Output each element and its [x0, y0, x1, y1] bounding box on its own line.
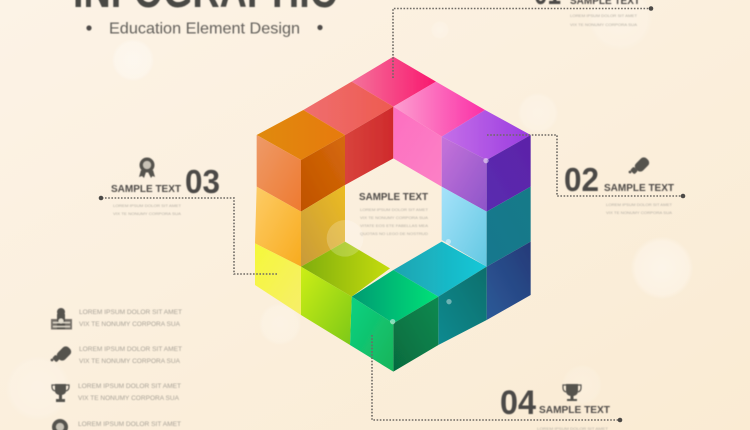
callout 03: 03	[185, 163, 220, 200]
list row: brush	[51, 345, 182, 365]
callout 02	[564, 156, 675, 215]
center text block: VITATE EOS ETE FABELLAS MEA	[360, 223, 428, 228]
list row: trophy: LOREM IPSUM DOLOR SIT AMET	[78, 384, 181, 390]
connector 01	[393, 8, 651, 78]
center text block: SAMPLE TEXT	[359, 191, 429, 203]
icon: brush 02	[629, 156, 651, 174]
upper side faces	[257, 107, 531, 212]
connector 02	[487, 135, 683, 196]
callout 01	[534, 0, 641, 27]
list row: trophy: VIX TE NONUMY CORPORA SUA	[78, 396, 179, 402]
list row: brush: LOREM IPSUM DOLOR SIT AMET	[79, 347, 182, 353]
list row: brush: VIX TE NONUMY CORPORA SUA	[79, 359, 180, 365]
list row: medal: LOREM IPSUM DOLOR SIT AMET	[78, 422, 181, 428]
callout 04	[500, 384, 611, 430]
glints on cube	[327, 158, 489, 324]
middle side faces	[255, 185, 531, 267]
callout 03: VIX TE NONUMY CORPORA SUA	[113, 211, 181, 216]
icon: building	[51, 308, 72, 330]
icon: trophy	[52, 384, 69, 402]
hexagonal cube ring	[255, 57, 531, 372]
connector 04	[372, 335, 620, 420]
list row: building: LOREM IPSUM DOLOR SIT AMET	[79, 310, 182, 316]
icon: medal	[52, 419, 68, 430]
callout 04: 04	[500, 384, 536, 422]
lower top faces	[301, 242, 487, 323]
subtitle: Education Element Design	[109, 20, 300, 38]
connector 03	[101, 198, 277, 274]
center text block	[359, 191, 429, 236]
icon: brush	[51, 345, 73, 362]
icon: medal 03	[139, 158, 155, 178]
top faces	[257, 57, 531, 160]
lower side faces	[255, 242, 531, 372]
callout 02: 02	[564, 161, 599, 198]
list row: medal	[52, 419, 181, 430]
center text block: LOREM IPSUM DOLOR SIT AMET	[360, 207, 429, 212]
list row: trophy	[52, 384, 181, 402]
callout 04: SAMPLE TEXT	[539, 404, 611, 416]
callout 03: SAMPLE TEXT	[111, 183, 182, 195]
list row: building	[51, 308, 182, 330]
callout 01: VIX TE NONUMY CORPORA SUA	[570, 22, 637, 27]
connector 04 end dot	[618, 418, 622, 422]
connector 02 end dot	[681, 194, 685, 198]
connector 01 end dot	[649, 6, 653, 11]
callout 03	[111, 158, 220, 216]
callout 02: VIX TE NONUMY CORPORA SUA	[606, 210, 672, 215]
center text block: QUOTAS NO LEGO DE NOSTRUD	[360, 231, 428, 236]
center text block: VIX TE NONUMY CORPORA SUA	[360, 215, 428, 220]
callout 01: LOREM IPSUM DOLOR SIT AMET	[570, 13, 638, 18]
connector 03 end dot	[99, 196, 103, 200]
callout 02: LOREM IPSUM DOLOR SIT AMET	[606, 202, 673, 207]
list row: building: VIX TE NONUMY CORPORA SUA	[79, 322, 180, 328]
icon: trophy 04	[563, 384, 581, 401]
callout 02: SAMPLE TEXT	[604, 182, 675, 194]
callout 03: LOREM IPSUM DOLOR SIT AMET	[113, 203, 182, 208]
